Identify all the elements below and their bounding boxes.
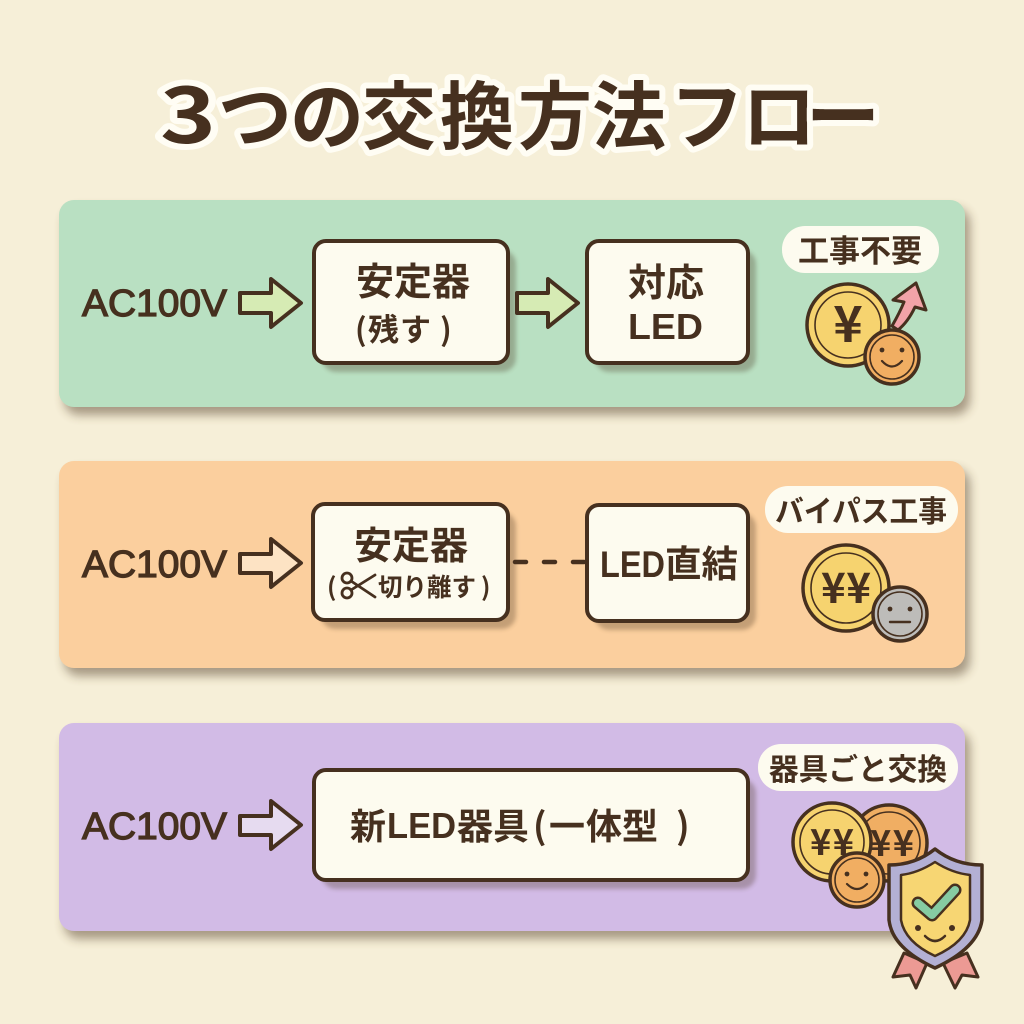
box: direct LED: [587, 505, 756, 630]
title: つの交換方法フロー: [218, 58, 880, 165]
connector: dashed bypass line: [515, 560, 585, 564]
box: ballast disconnected: (: [327, 568, 336, 604]
box: compatible LED: [587, 241, 756, 372]
icon: shield badge with check: [889, 849, 982, 988]
icon: low cost coins with arrow: ¥: [833, 285, 863, 357]
title: 3: [160, 55, 216, 165]
box: new integrated LED fixture: [314, 770, 756, 889]
arrow: AC to fixture: [240, 801, 301, 849]
icon: high cost coins: [793, 803, 927, 907]
box: ballast disconnected: ): [481, 568, 490, 604]
panel: method 2, bypass: [59, 461, 970, 676]
box: ballast disconnected: 安定器: [354, 515, 468, 570]
icon: medium cost coins: ¥¥: [821, 555, 871, 616]
icon: medium cost coins: [803, 545, 927, 641]
box: ballast kept: (残す): [355, 305, 452, 350]
icon: scissors: [342, 573, 375, 598]
icon: high cost coins: ¥¥: [870, 815, 914, 867]
panel: method 1, keep ballast: [59, 200, 970, 415]
tag: replace whole fixture: 器具ごと交換: [769, 745, 947, 789]
box: ballast kept: 安定器: [356, 251, 470, 306]
box: new integrated LED fixture: 新: [350, 798, 386, 850]
icon: high cost coins: ¥¥: [810, 814, 854, 866]
box: compatible LED: 対応: [628, 252, 704, 307]
box: ballast disconnected: 切り離す: [378, 568, 476, 604]
label: AC100V input: AC100V: [82, 544, 228, 586]
panel: method 3, replace fixture: [59, 723, 970, 939]
label: AC100V input: AC100V: [82, 283, 228, 325]
arrow: AC to ballast: [240, 539, 301, 587]
box: direct LED: 直結: [665, 534, 738, 588]
tag: no construction needed: 工事不要: [798, 226, 922, 271]
box: direct LED: LED: [600, 544, 665, 585]
box: new integrated LED fixture: LED: [387, 805, 456, 846]
tag: bypass work: バイパス工事: [775, 487, 947, 531]
icon: low cost coins with arrow: [807, 283, 926, 384]
box: ballast kept: [314, 241, 516, 372]
box: compatible LED: LED: [628, 306, 703, 347]
arrow: ballast to LED: [517, 279, 578, 327]
box: new integrated LED fixture: 器具(一体型): [457, 798, 690, 850]
box: ballast disconnected: [313, 504, 516, 629]
arrow: AC to ballast: [240, 279, 301, 327]
label: AC100V input: AC100V: [82, 806, 228, 848]
